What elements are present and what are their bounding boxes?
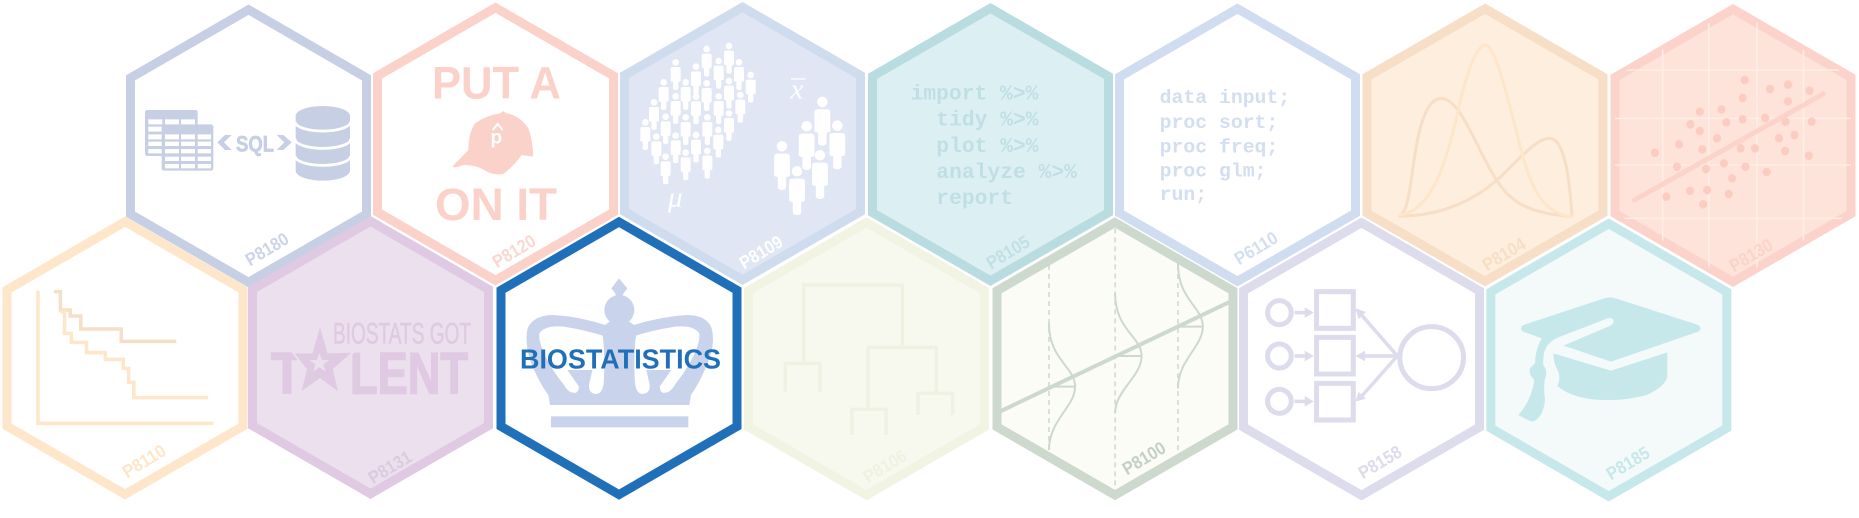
code block: pipeline: analyze %>% [936, 161, 1077, 185]
label: P8109: P8109 [736, 232, 786, 273]
chart: dendrogram [785, 285, 953, 435]
code block: SAS: data input; [1160, 87, 1290, 109]
label: P8130: P8130 [1726, 235, 1776, 276]
heading: BIOSTATISTICS: BIOSTATISTICS [520, 344, 721, 374]
icon: cap [452, 111, 533, 175]
code block: SAS: proc freq; [1160, 136, 1278, 158]
heading: PUT A: PUT A [432, 58, 561, 108]
hexagon: P8131 biostats got talent [252, 221, 488, 494]
hexagon: P8109 population and sample [624, 7, 860, 280]
heading: ON IT: ON IT [435, 179, 557, 230]
hexagon: P8105 tidy pipeline [872, 8, 1108, 281]
label: P8158: P8158 [1355, 442, 1405, 483]
code block: pipeline [911, 82, 1077, 211]
heading: TALENT with star [271, 324, 468, 406]
code block: SAS: proc sort; [1160, 112, 1278, 134]
chart: regression line with normal densities [1000, 228, 1230, 497]
label: P8105: P8105 [983, 232, 1033, 273]
hexagon: Biostatistics crown [501, 222, 737, 495]
chart: density curves [1399, 45, 1572, 217]
hexagon: P8104 distributions [1367, 9, 1603, 281]
label: P8110: P8110 [119, 441, 169, 482]
text: SQL: SQL [236, 132, 274, 157]
code block: pipeline: plot %>% [936, 135, 1039, 159]
icon: tables, SQL and database [145, 106, 351, 181]
hexagon: P6110 SAS code [1120, 9, 1356, 281]
icon: graduation cap [1518, 297, 1700, 422]
icon: population and sample people [640, 43, 845, 215]
heading: TALENT with star: LENT [350, 341, 468, 406]
code block: pipeline: import %>% [911, 82, 1039, 106]
code block: SAS: run; [1160, 184, 1207, 206]
chart: scatter with regression line [1615, 22, 1851, 268]
label: P8120: P8120 [489, 231, 539, 272]
hexagon: P8106 dendrogram [748, 222, 984, 495]
label: P8185: P8185 [1603, 443, 1653, 484]
text: p: p [490, 128, 502, 148]
code block: pipeline: report [936, 187, 1013, 211]
hexagon: P8130 scatter plot [1611, 0, 1856, 287]
diagram: factor model [1268, 292, 1463, 420]
chart: Kaplan-Meier steps [38, 291, 213, 423]
icon: crown [527, 278, 713, 427]
hexagon: P8100 linear regression [997, 222, 1233, 497]
hexagon: P8110 survival curves [7, 222, 243, 494]
label: P6110: P6110 [1231, 228, 1281, 269]
code block: SAS [1160, 87, 1290, 206]
code block: pipeline: tidy %>% [936, 108, 1039, 132]
label: P8100: P8100 [1119, 438, 1169, 479]
hexagon: P8120 put a p-hat on it [378, 8, 614, 280]
label: P8104: P8104 [1479, 234, 1529, 275]
heading: TALENT with star: T [271, 341, 303, 406]
hexagon: P8180 SQL [130, 10, 366, 282]
hexagon: P8158 latent variable model [1244, 223, 1480, 495]
label: P8180: P8180 [242, 229, 292, 270]
code block: SAS: proc glm; [1160, 160, 1266, 182]
text: x-bar: x [790, 73, 804, 105]
hexagon: P8185 graduation cap [1491, 224, 1727, 496]
label: P8106: P8106 [860, 446, 910, 487]
label: P8131: P8131 [365, 447, 415, 488]
text: mu: μ [667, 182, 683, 214]
heading: BIOSTATS GOT: BIOSTATS GOT [333, 317, 471, 350]
